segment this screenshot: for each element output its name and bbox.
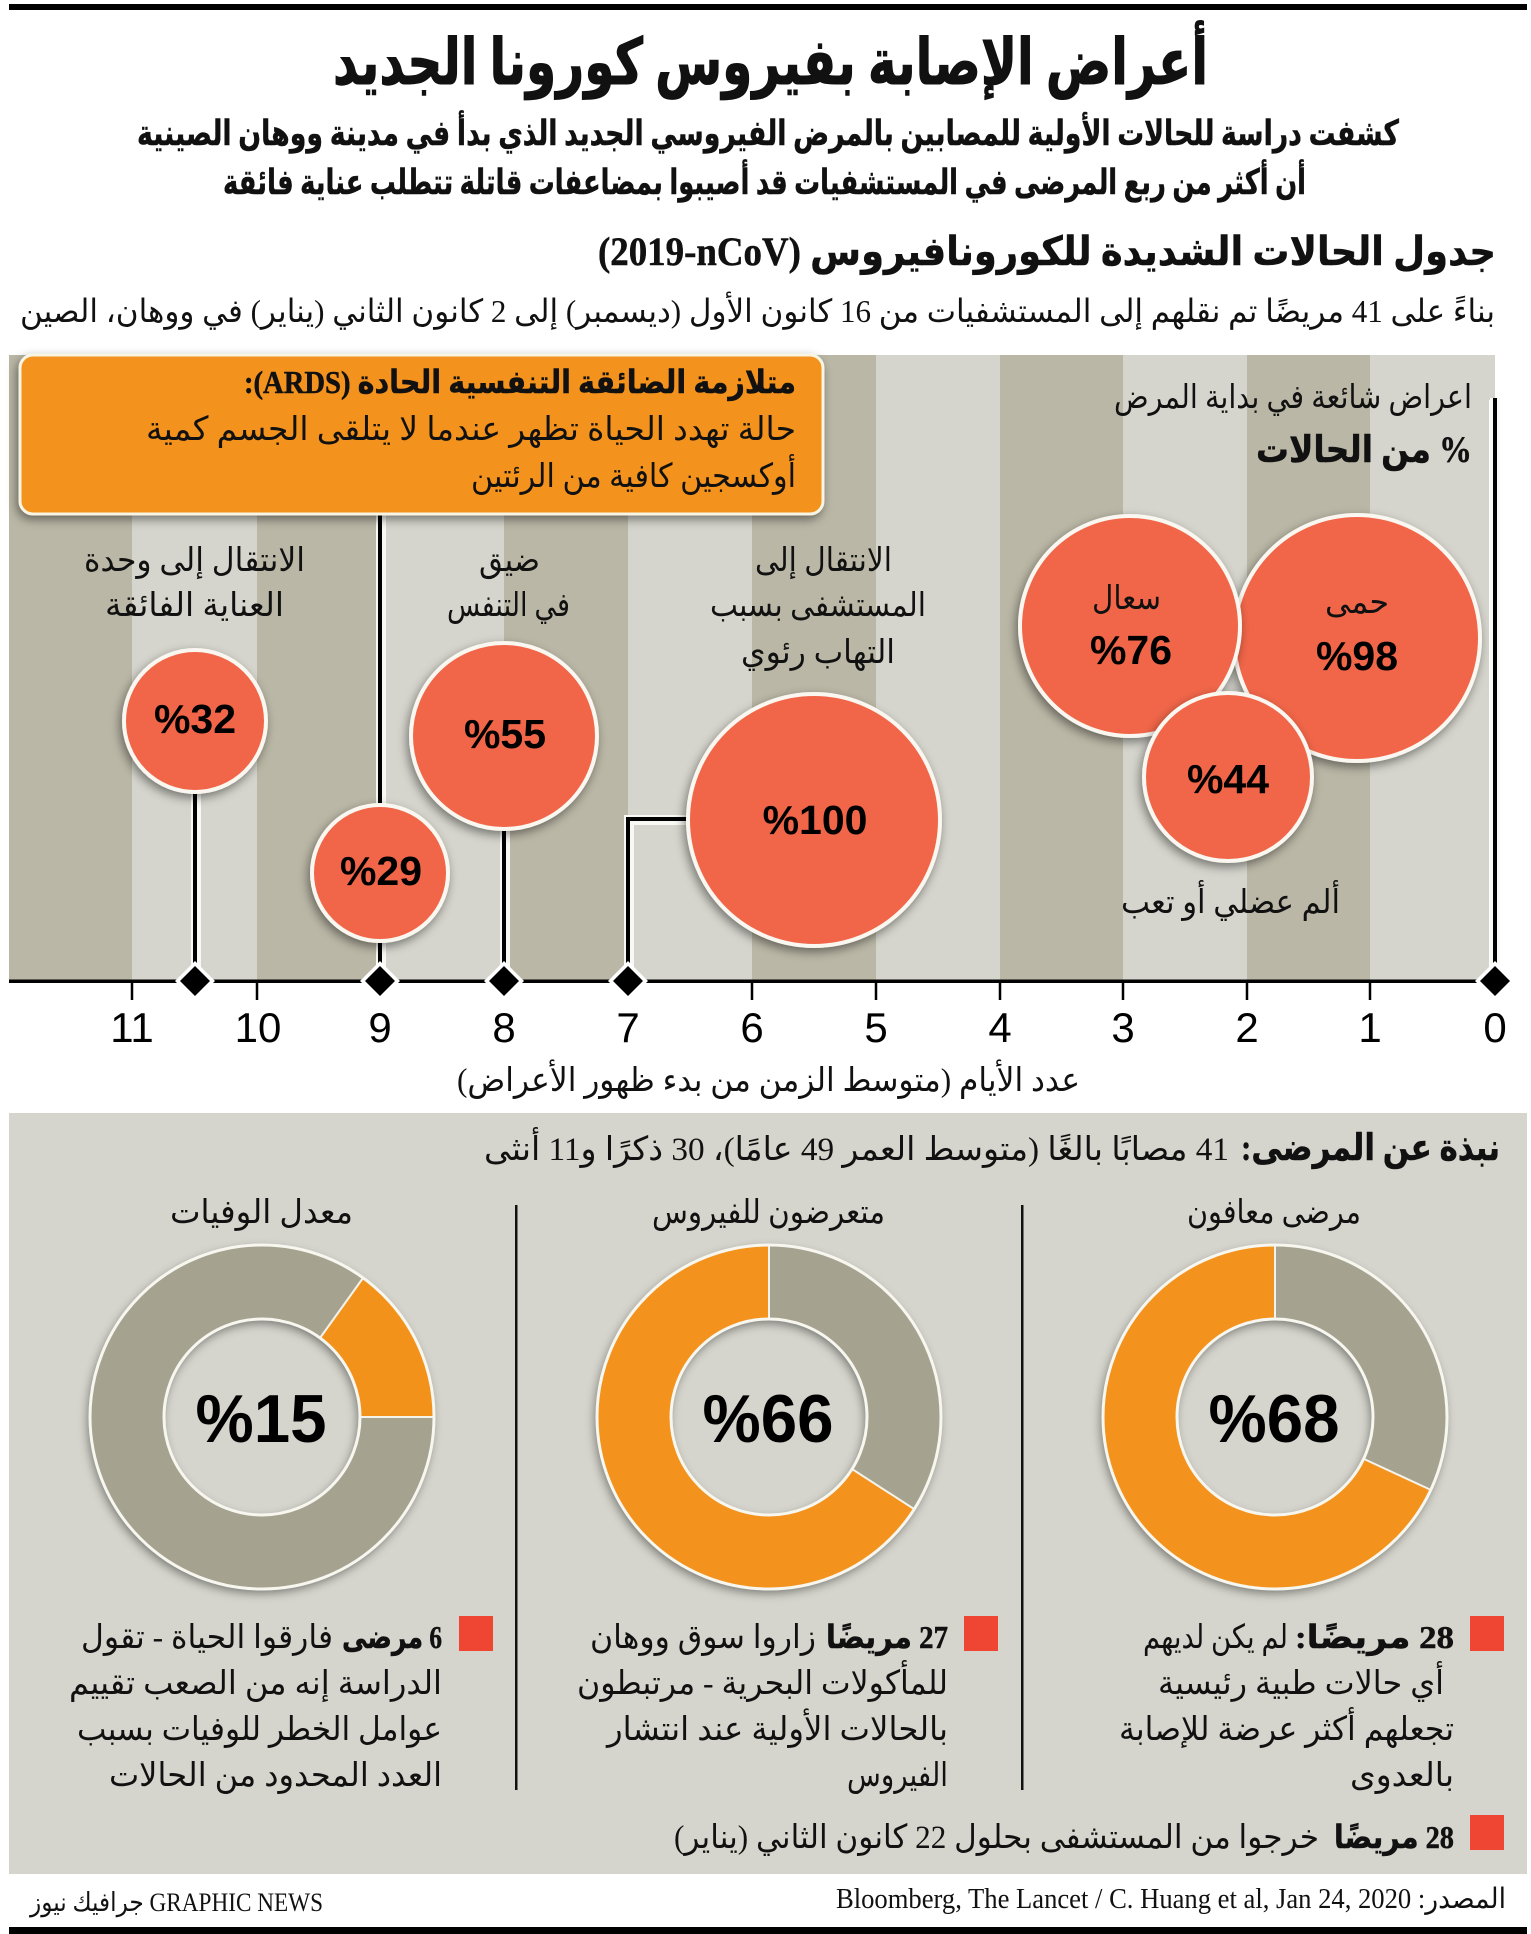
donut: 15%: %15 — [196, 1381, 326, 1457]
column: death rate: عوامل الخطر للوفيات بسبب — [77, 1712, 442, 1748]
axis numbers: 4 — [988, 1004, 1012, 1051]
timeline axis — [9, 961, 1515, 1001]
column: recovered patients: مرضى معافون — [1187, 1195, 1361, 1231]
orange callout: ARDS: أوكسجين كافية من الرئتين — [471, 454, 796, 495]
bubble: muscle pain 44% — [1144, 693, 1312, 861]
bubble: fever 98%: %98 — [1316, 633, 1398, 679]
axis numbers — [110, 1004, 1507, 1051]
column: death rate: الدراسة إنه من الصعب تقييم — [69, 1666, 442, 1703]
axis numbers: 8 — [492, 1004, 516, 1051]
column: exposed to virus: زاروا سوق ووهان — [590, 1620, 816, 1656]
column: exposed to virus: بالحالات الأولية عند انتشار — [605, 1708, 948, 1748]
column: exposed to virus: للمأكولات البحرية - مرتبطون — [577, 1660, 948, 1702]
axis numbers: 10 — [235, 1004, 281, 1051]
column: recovered patients: 28 مريضًا: — [1295, 1619, 1454, 1656]
donut: 15% — [73, 1228, 451, 1606]
column: exposed to virus — [577, 1195, 998, 1794]
chart background stripes — [9, 355, 1495, 981]
footer: credit: GRAPHIC NEWS جرافيك نيوز — [28, 1888, 323, 1918]
column: death rate: معدل الوفيات — [170, 1195, 353, 1231]
axis title: عدد الأيام (متوسط الزمن من بدء ظهور الأعراض) — [457, 1059, 1080, 1100]
legend: common symptoms: % من الحالات — [1256, 430, 1472, 471]
bubble: cough 76% — [1020, 516, 1240, 736]
column: recovered patients: أي حالات طبية رئيسية — [1158, 1661, 1444, 1702]
footer: source: المصدر: Bloomberg, The Lancet / C. Huang et al, Jan 24, 2020 — [836, 1884, 1506, 1915]
column: exposed to virus: 27 مريضًا — [826, 1619, 948, 1656]
bubble: fever 98%: حمى — [1325, 585, 1389, 621]
axis numbers: 9 — [368, 1004, 392, 1051]
column: death rate: العدد المحدود من الحالات — [109, 1758, 442, 1794]
bubble: muscle pain 44%: %44 — [1187, 756, 1269, 802]
label: muscle pain or fatigue: ألم عضلي أو تعب — [1121, 880, 1340, 921]
bubble: ARDS 29% — [312, 805, 448, 941]
axis numbers: 2 — [1235, 1004, 1259, 1051]
bubble: ICU 32% — [124, 650, 266, 792]
orange callout: ARDS: متلازمة الضائقة التنفسية الحادة (ARDS): — [244, 364, 796, 401]
panel: patient profile — [9, 1113, 1527, 1874]
bubble: shortness of breath 55%: %55 — [464, 711, 546, 757]
column: recovered patients — [1103, 1195, 1504, 1794]
axis numbers: 3 — [1111, 1004, 1135, 1051]
connector lines — [195, 398, 1495, 981]
axis numbers: 5 — [864, 1004, 888, 1051]
label: hospital admission: الانتقال إلى — [755, 543, 892, 580]
profile heading — [484, 1127, 1500, 1169]
donut: 66%: %66 — [702, 1381, 834, 1457]
intro text — [137, 110, 1399, 203]
bubble: cough 76%: سعال — [1092, 581, 1161, 617]
label: hospital admission: التهاب رئوي — [741, 635, 895, 671]
axis numbers: 11 — [110, 1004, 154, 1051]
bubble: shortness of breath 55% — [411, 643, 597, 829]
bubble: hospital admission 100%: %100 — [763, 797, 867, 843]
label: ICU transfer: العناية الفائقة — [105, 588, 284, 624]
profile heading: 41 مصابًا بالغًا (متوسط العمر 49 عامًا)، 30 ذكرًا و11 أنثى — [484, 1127, 1229, 1168]
axis numbers: 6 — [740, 1004, 764, 1051]
donut: 68% — [1103, 1245, 1447, 1589]
label: shortness of breath: في التنفس — [447, 588, 570, 624]
bubble: fever 98% — [1234, 515, 1480, 761]
chart subheading: بناءً على 41 مريضًا تم نقلهم إلى المستشفيات من 16 كانون الأول (ديسمبر) إلى 2 كانون الثاني (يناير) في ووهان، الصين — [20, 291, 1495, 330]
bubble: ARDS 29%: %29 — [340, 848, 422, 894]
title: أعراض الإصابة بفيروس كورونا الجديد — [333, 20, 1208, 100]
column: recovered patients: تجعلهم أكثر عرضة للإصابة — [1119, 1707, 1454, 1748]
label: ICU transfer: الانتقال إلى وحدة — [84, 543, 305, 580]
label: shortness of breath — [447, 543, 570, 624]
label: shortness of breath: ضيق — [479, 543, 540, 580]
column: recovered patients: بالعدوى — [1350, 1758, 1454, 1794]
column: recovered patients: لم يكن لديهم — [1143, 1620, 1288, 1656]
axis numbers: 1 — [1358, 1004, 1382, 1051]
legend: common symptoms — [1114, 380, 1472, 471]
label: hospital admission: المستشفى بسبب — [710, 588, 926, 624]
panel: timeline chart — [9, 355, 1515, 1100]
discharged note: خرجوا من المستشفى بحلول 22 كانون الثاني (يناير) — [674, 1820, 1319, 1856]
donut: 66% — [597, 1245, 941, 1589]
column: exposed to virus: الفيروس — [847, 1758, 948, 1794]
donut: 68%: %68 — [1208, 1381, 1340, 1457]
bubble: ICU 32%: %32 — [154, 696, 236, 742]
discharged note: 28 مريضًا — [1334, 1819, 1454, 1856]
column: death rate: 6 مرضى — [342, 1619, 442, 1656]
label: hospital admission — [710, 543, 926, 671]
axis numbers: 0 — [1483, 1004, 1507, 1051]
orange callout: ARDS: حالة تهدد الحياة تظهر عندما لا يتلقى الجسم كمية — [146, 412, 796, 448]
bubble: hospital admission 100% — [688, 694, 940, 946]
bubble: cough 76%: %76 — [1090, 627, 1172, 673]
orange callout: ARDS — [20, 355, 823, 514]
axis numbers: 7 — [616, 1004, 640, 1051]
column: death rate: فارقوا الحياة - تقول — [81, 1620, 333, 1656]
column: death rate — [69, 1195, 493, 1794]
column: exposed to virus: متعرضون للفيروس — [652, 1195, 885, 1231]
legend: common symptoms: اعراض شائعة في بداية المرض — [1114, 380, 1472, 417]
chart heading: جدول الحالات الشديدة للكورونافيروس (⁦2019-nCoV⁩) — [598, 229, 1496, 275]
label: ICU transfer — [84, 543, 305, 624]
